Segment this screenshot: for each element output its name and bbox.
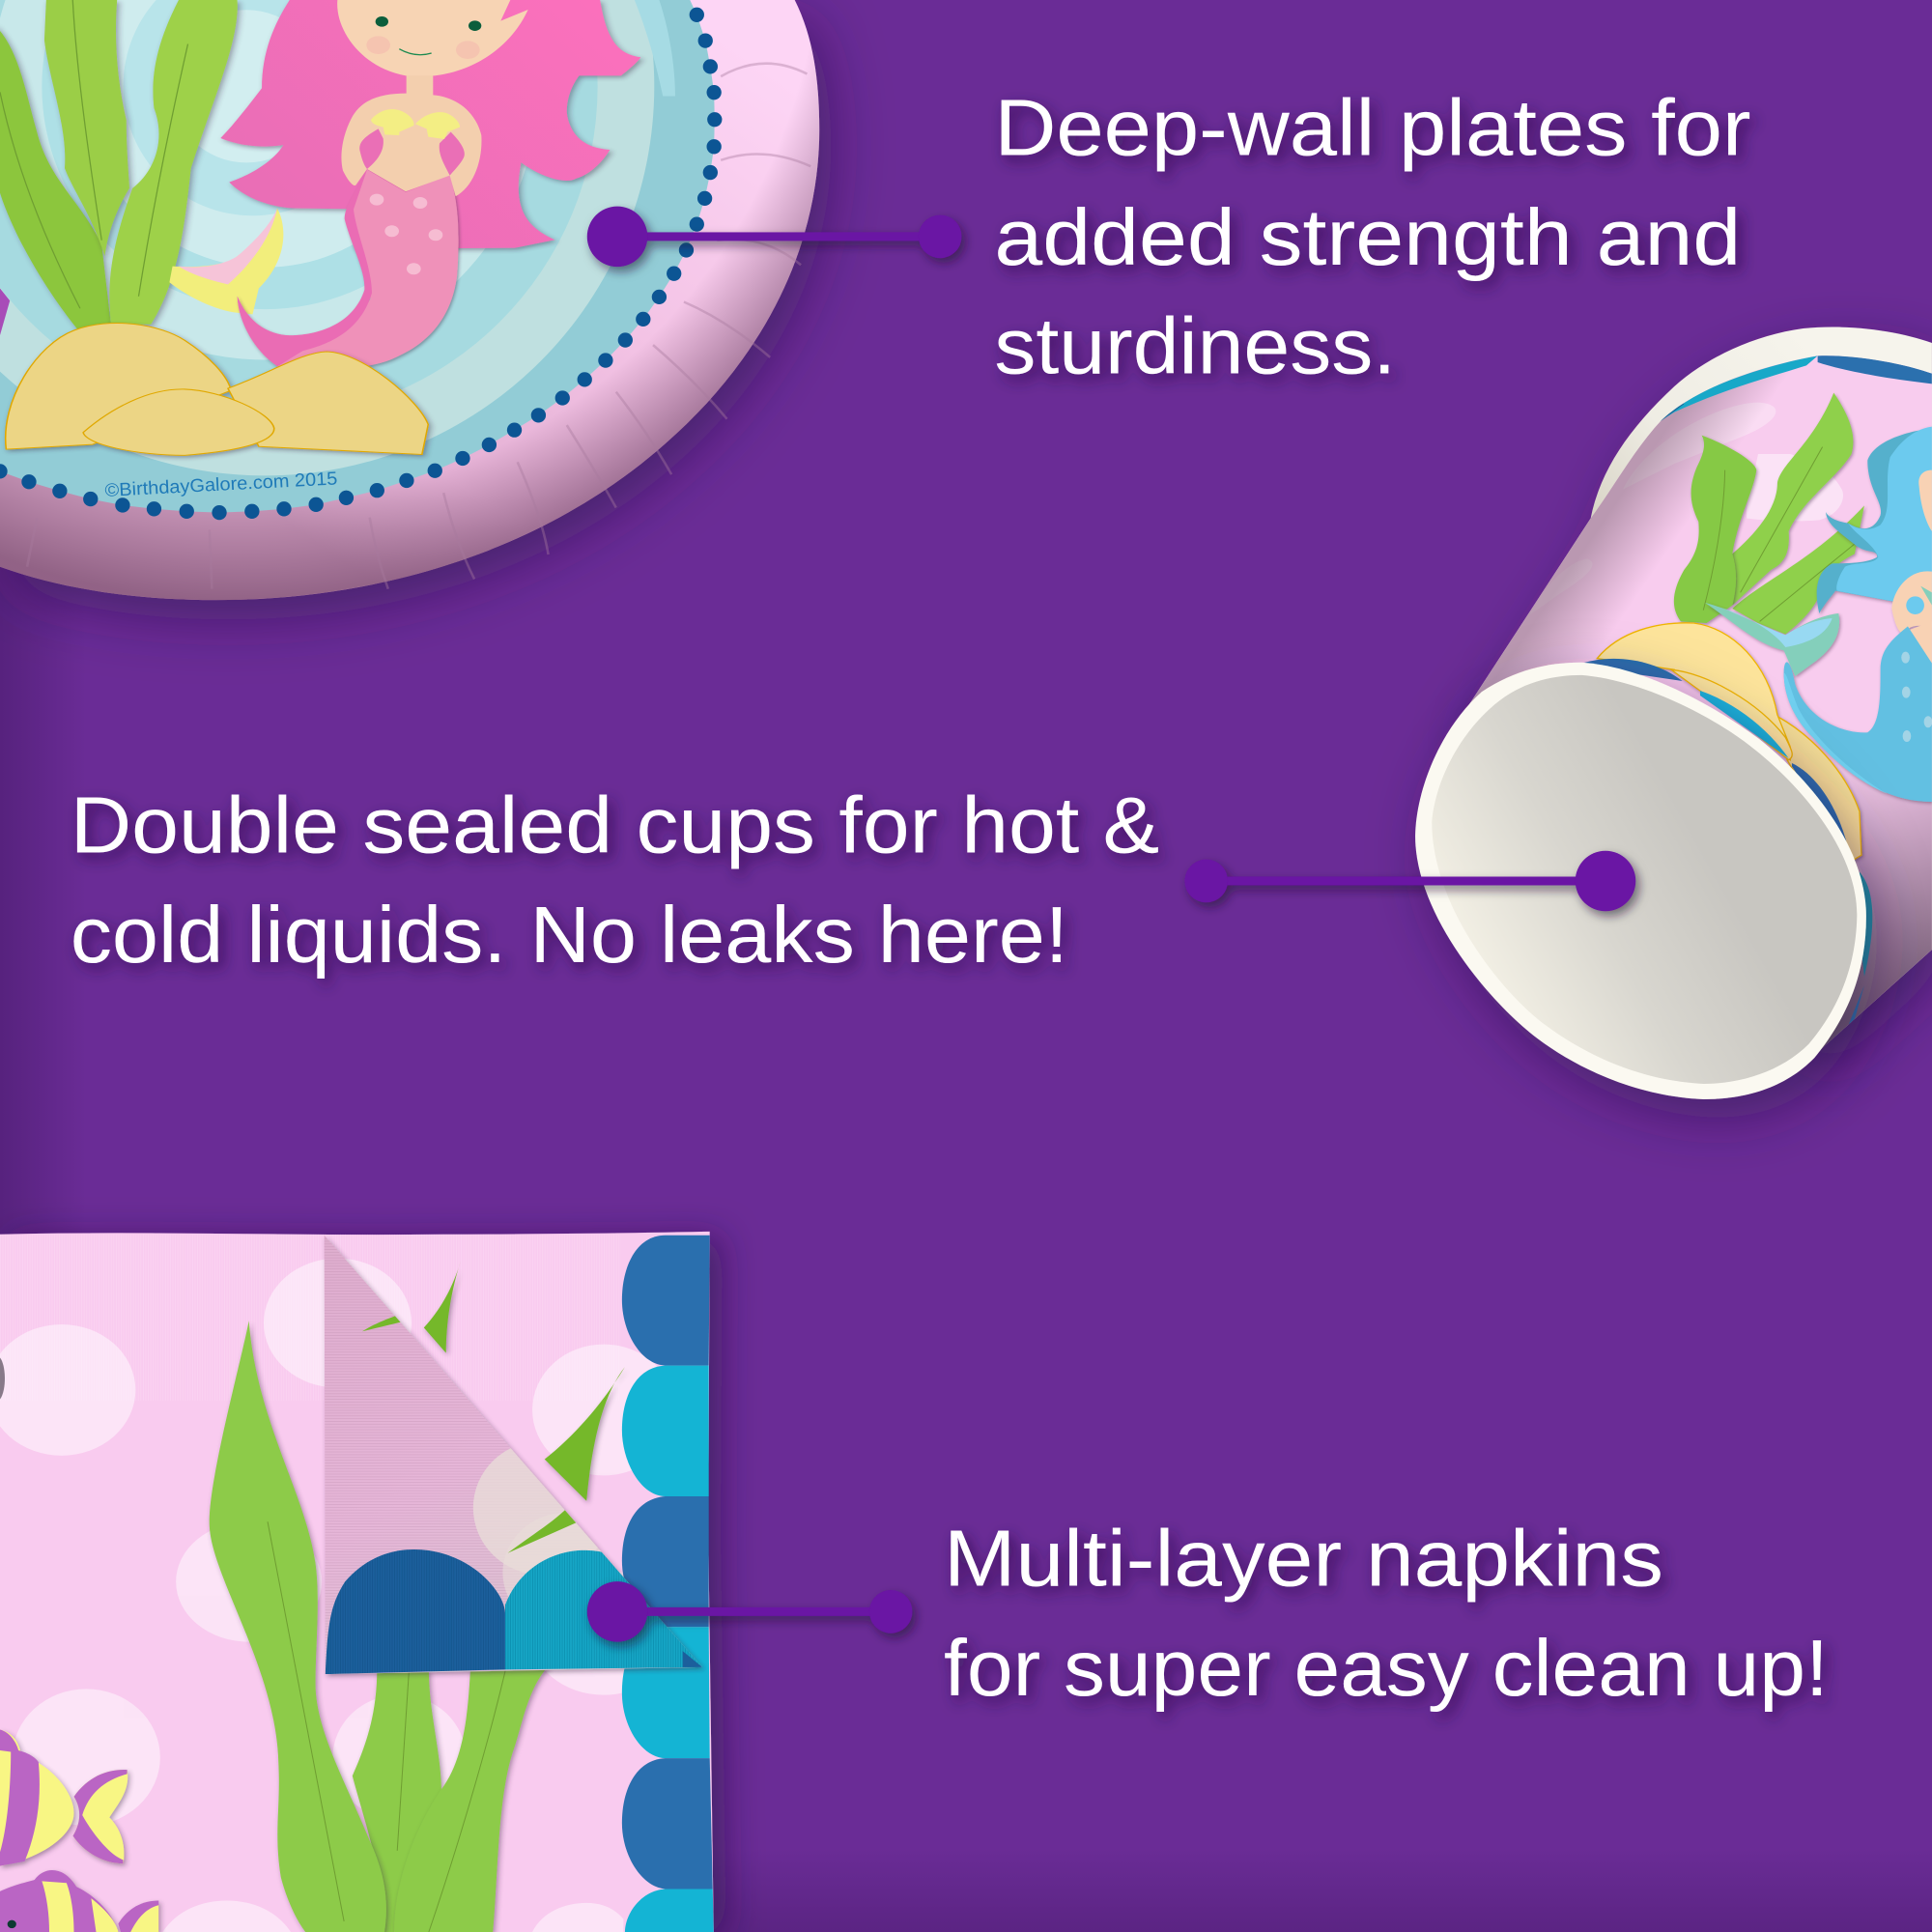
fish <box>0 1729 158 1932</box>
folded corner <box>325 1236 702 1674</box>
rocks <box>6 324 428 455</box>
text: cups: cold liquids. No leaks here! <box>71 890 1068 980</box>
text: napkins: Multi-layer napkins <box>944 1514 1663 1604</box>
cup rocks <box>1597 623 1861 863</box>
plate centre with swirl <box>0 0 739 529</box>
plate <box>0 0 819 600</box>
fish one <box>0 1729 128 1866</box>
face <box>337 0 528 75</box>
cup top band <box>1660 355 1932 422</box>
polka dots <box>0 1259 678 1932</box>
callout connector: plate <box>587 207 962 267</box>
mermaid arm <box>1891 571 1932 633</box>
mermaid tail fin <box>1705 603 1839 676</box>
callout connector: cup <box>1184 851 1635 911</box>
hair gaps between arms <box>359 128 465 176</box>
text: plates <box>994 83 1750 390</box>
pink hair <box>220 0 640 248</box>
tail <box>238 170 459 369</box>
callout connector: napkin <box>587 1581 913 1642</box>
cup <box>1415 327 1932 1099</box>
cup artwork <box>1449 341 1932 1065</box>
cup wall and rim <box>1456 327 1932 1052</box>
cup base <box>1415 663 1866 1099</box>
left-edge purple fragment on plate <box>0 288 10 335</box>
neighbouring fish fragment <box>0 1357 5 1400</box>
text: plates: sturdiness. <box>994 300 1396 390</box>
scalloped border <box>622 1236 714 1932</box>
copyright note: ©BirthdayGalore.com 2015 <box>104 469 338 501</box>
mermaid tail <box>1784 626 1932 802</box>
back tail fin <box>169 209 283 314</box>
seaweed, tail fin, hair and rocks artwork <box>0 0 640 332</box>
text: napkins: for super easy clean up! <box>944 1623 1829 1713</box>
torso and arms <box>341 72 481 196</box>
text: plates: added strength and <box>994 192 1741 282</box>
text: plates: Deep-wall plates for <box>994 83 1750 173</box>
shell top <box>371 109 460 139</box>
napkin seaweed <box>210 1261 625 1932</box>
mermaid hair <box>1817 428 1932 613</box>
seaweed <box>0 0 238 332</box>
cup seaweed <box>1674 393 1864 635</box>
napkin sheet <box>0 1232 714 1932</box>
dotted border <box>0 8 722 520</box>
plate rim <box>0 0 819 600</box>
mermaid figure <box>238 0 528 369</box>
cup scalloped border pieces <box>1584 659 1872 1024</box>
text: cups <box>71 781 1159 980</box>
fish two <box>0 1870 158 1932</box>
text: cups: Double sealed cups for hot & <box>71 781 1159 870</box>
cup mermaid <box>1705 427 1932 802</box>
text: napkins <box>944 1514 1829 1713</box>
napkin <box>0 1232 714 1932</box>
